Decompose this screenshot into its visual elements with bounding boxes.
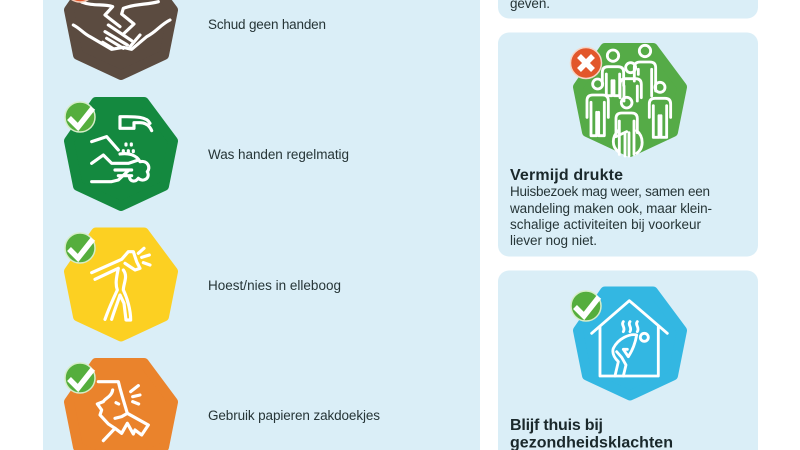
panel: left hygiene rules: [43, 0, 480, 450]
rule: wash hands: [65, 102, 349, 206]
icon: yellow hexagon coughing figure: [65, 232, 173, 336]
heading: stay home with health complaints: [510, 417, 673, 450]
icon: green hexagon crowd: [570, 45, 682, 156]
rule: paper tissues: [65, 363, 380, 450]
icon: blue hexagon sick person at home: [571, 291, 682, 396]
icon: green hexagon washing hands: [65, 102, 173, 206]
panel: card top fragment: [498, 0, 758, 18]
text: avoid crowds description: Huisbezoek mag weer, samen een: [510, 184, 710, 199]
text: avoid crowds description: schalige activiteiten bij voorkeur: [510, 217, 702, 232]
text: avoid crowds description: [509, 184, 712, 248]
label: cough: Hoest/nies in elleboog: [208, 278, 341, 293]
icon: green check: [65, 363, 95, 393]
icon: green check: [65, 102, 95, 132]
icon: green check: [65, 233, 95, 263]
text: avoid crowds description: wandeling maken ook, maar klein-: [509, 201, 712, 216]
icon: orange hexagon sneezing into tissue: [65, 363, 173, 450]
icon: green check: [571, 291, 601, 321]
label: handshake: Schud geen handen: [208, 17, 326, 32]
heading: stay home with health complaints: Blijf thuis bij: [510, 417, 603, 434]
panel: avoid crowds: [498, 32, 758, 256]
rule: no handshake: [65, 0, 326, 75]
label: tissues: Gebruik papieren zakdoekjes: [208, 408, 380, 423]
heading: avoid crowds: Vermijd drukte: [510, 167, 623, 184]
icon: red cross: [570, 48, 602, 78]
rule: cough in elbow: [65, 232, 341, 336]
panel: stay home: [498, 270, 758, 450]
icon: brown hexagon handshake: [65, 0, 173, 75]
label: wash hands: Was handen regelmatig: [208, 147, 349, 162]
text: avoid crowds description: liever nog niet.: [510, 233, 597, 248]
